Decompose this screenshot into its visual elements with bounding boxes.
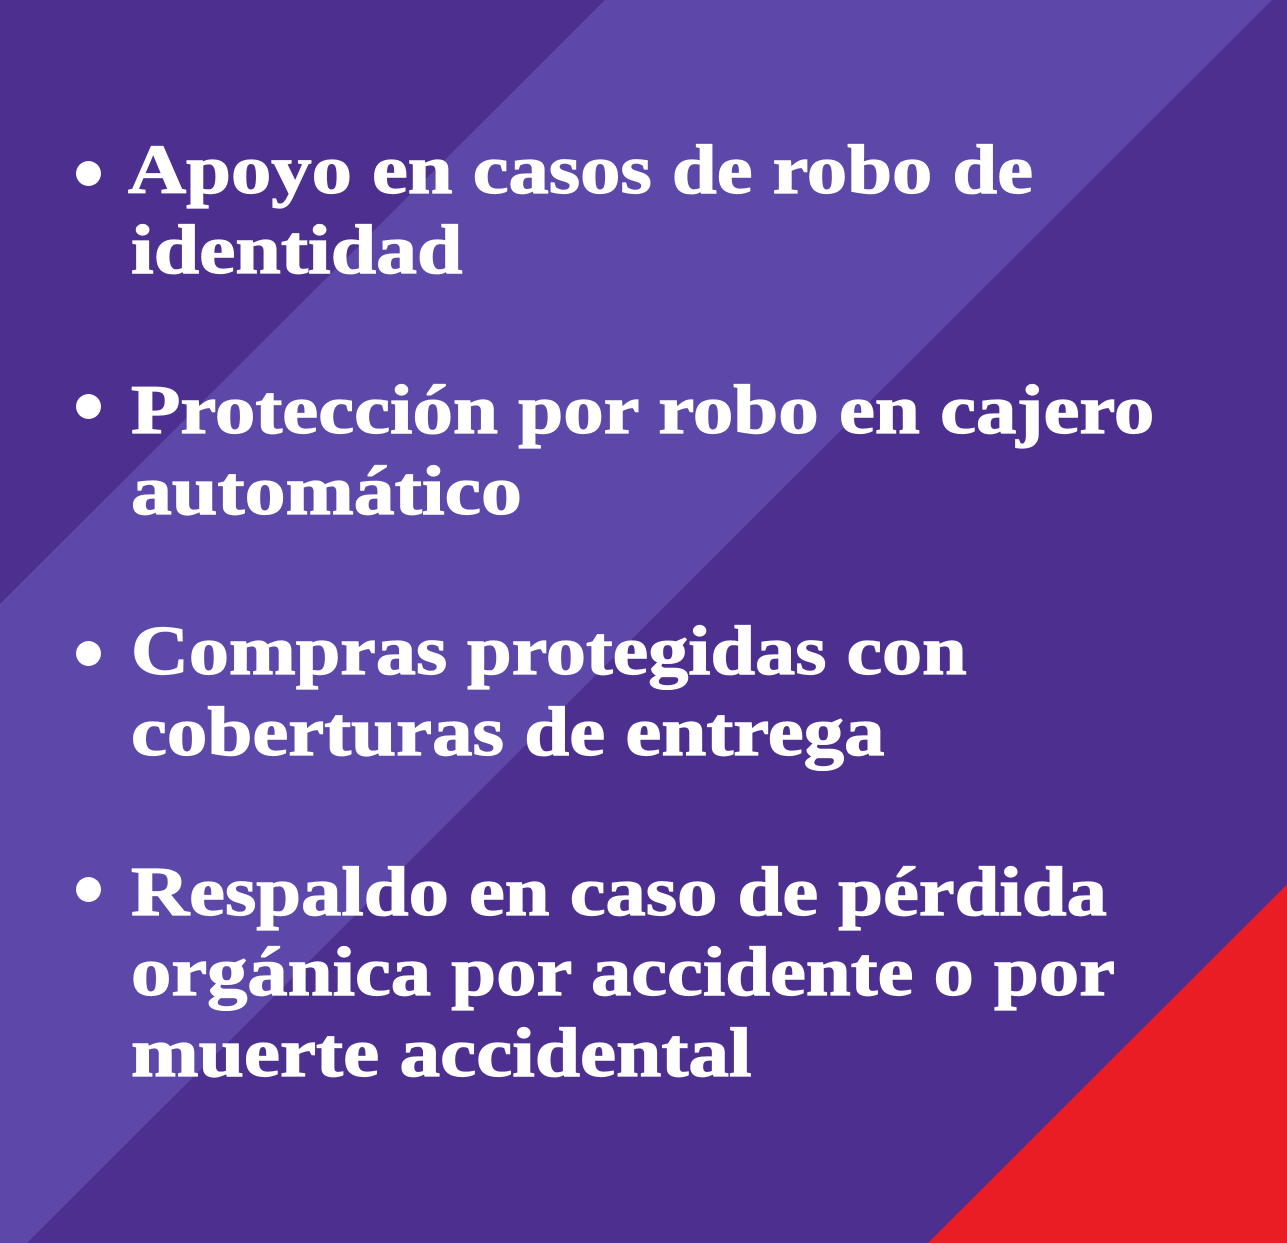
infographic panel: automático — [130, 453, 521, 530]
bullet item: ATM theft — [76, 372, 1154, 530]
bullet item: protected purchases — [76, 613, 966, 771]
infographic panel: Respaldo en caso de pérdida — [130, 854, 1106, 931]
infographic panel: coberturas de entrega — [130, 694, 884, 771]
infographic panel: Protección por robo en cajero — [130, 372, 1154, 449]
infographic panel: muerte accidental — [130, 1015, 751, 1092]
infographic panel: Apoyo en casos de robo de — [128, 132, 1033, 209]
infographic panel: Compras protegidas con — [130, 613, 966, 690]
infographic panel: identidad — [130, 212, 462, 289]
bullet item: accident coverage — [76, 854, 1114, 1092]
bullet item: identity theft — [76, 132, 1033, 289]
infographic panel: orgánica por accidente o por — [130, 934, 1114, 1011]
